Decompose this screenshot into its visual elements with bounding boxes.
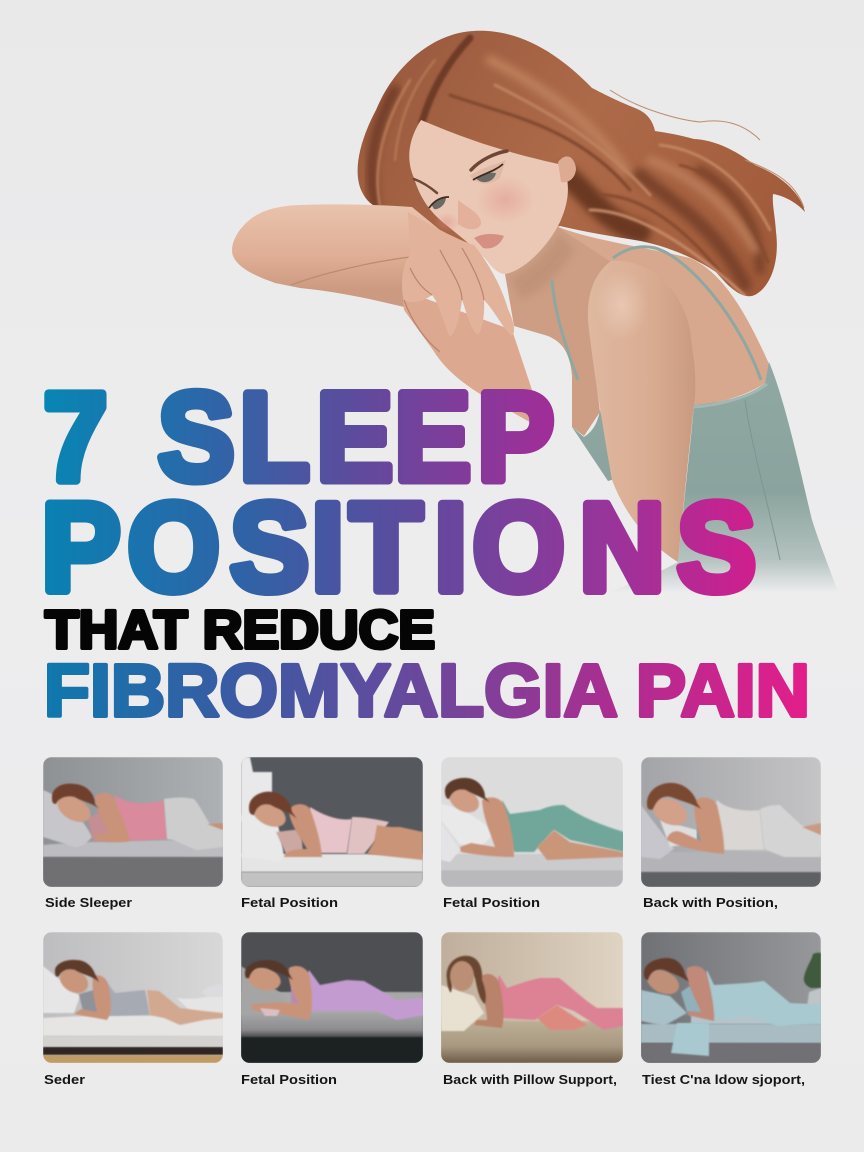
- card: Tiest C'na ldow sjoport: [641, 932, 821, 1087]
- tank straps: [552, 247, 761, 380]
- title line: POSITIONS: POSITIONS: [41, 478, 756, 617]
- card: Fetal Position 3: [241, 932, 424, 1087]
- forearm: [232, 204, 440, 307]
- label: Side Sleeper: [45, 895, 132, 910]
- card: Side Sleeper: [43, 757, 223, 910]
- image: woman in pale blue on bed with plant: [641, 932, 821, 1063]
- label: Fetal Position: [241, 895, 338, 910]
- forearm crease: [291, 257, 410, 285]
- image: woman in pink on beige bed: [441, 932, 623, 1063]
- back and shoulder skin: [556, 226, 769, 405]
- eyes: [429, 160, 506, 209]
- title line: FIBROMYALGIA PAIN: FIBROMYALGIA PAIN: [44, 649, 810, 732]
- shoulder highlight: [596, 269, 648, 341]
- subtitle: THAT REDUCE: THAT REDUCE: [45, 600, 435, 660]
- illustration: woman resting head on her arms: [232, 31, 838, 592]
- card: Fetal Position 2: [441, 757, 624, 910]
- title line: 7 SLEEP: 7 SLEEP: [44, 368, 554, 507]
- label: Back with Pillow Support,: [443, 1072, 617, 1087]
- tank top: [572, 362, 838, 592]
- hands and fingers: [402, 212, 540, 428]
- card: Back with Position: [641, 757, 821, 910]
- image: woman sleeping in white top: [641, 757, 821, 887]
- hair shading strands: [372, 38, 770, 296]
- label: Fetal Position: [241, 1072, 337, 1087]
- cheek blush left: [434, 212, 460, 232]
- arm: [588, 261, 695, 562]
- flyaway hair strands: [610, 90, 804, 208]
- nose: [458, 200, 481, 229]
- title: [41, 368, 810, 732]
- image: woman on white sofa: [43, 932, 223, 1063]
- card: Back with Pillow Support: [441, 932, 623, 1087]
- lips: [474, 234, 504, 248]
- image: woman sleeping in pale pink shorts: [241, 757, 423, 887]
- label: Back with Position,: [643, 895, 778, 910]
- label: Seder: [44, 1072, 85, 1087]
- image: woman in purple on dark bed: [241, 932, 424, 1063]
- hair back mass: [358, 31, 805, 296]
- eye brows: [414, 151, 507, 193]
- neck shadow: [510, 232, 575, 300]
- ear: [558, 156, 576, 182]
- cheek blush: [475, 176, 535, 224]
- image: woman sleeping in teal dress: [441, 757, 624, 887]
- label: Tiest C'na ldow sjoport,: [642, 1072, 805, 1087]
- panel: sleep positions grid: [43, 757, 821, 1087]
- chest and neck skin: [505, 226, 611, 436]
- face: [409, 120, 568, 274]
- card: Seder: [43, 932, 223, 1087]
- label: Fetal Position: [443, 895, 540, 910]
- card: Fetal Position 1: [241, 757, 423, 910]
- image: woman sleeping in pink top: [43, 757, 223, 887]
